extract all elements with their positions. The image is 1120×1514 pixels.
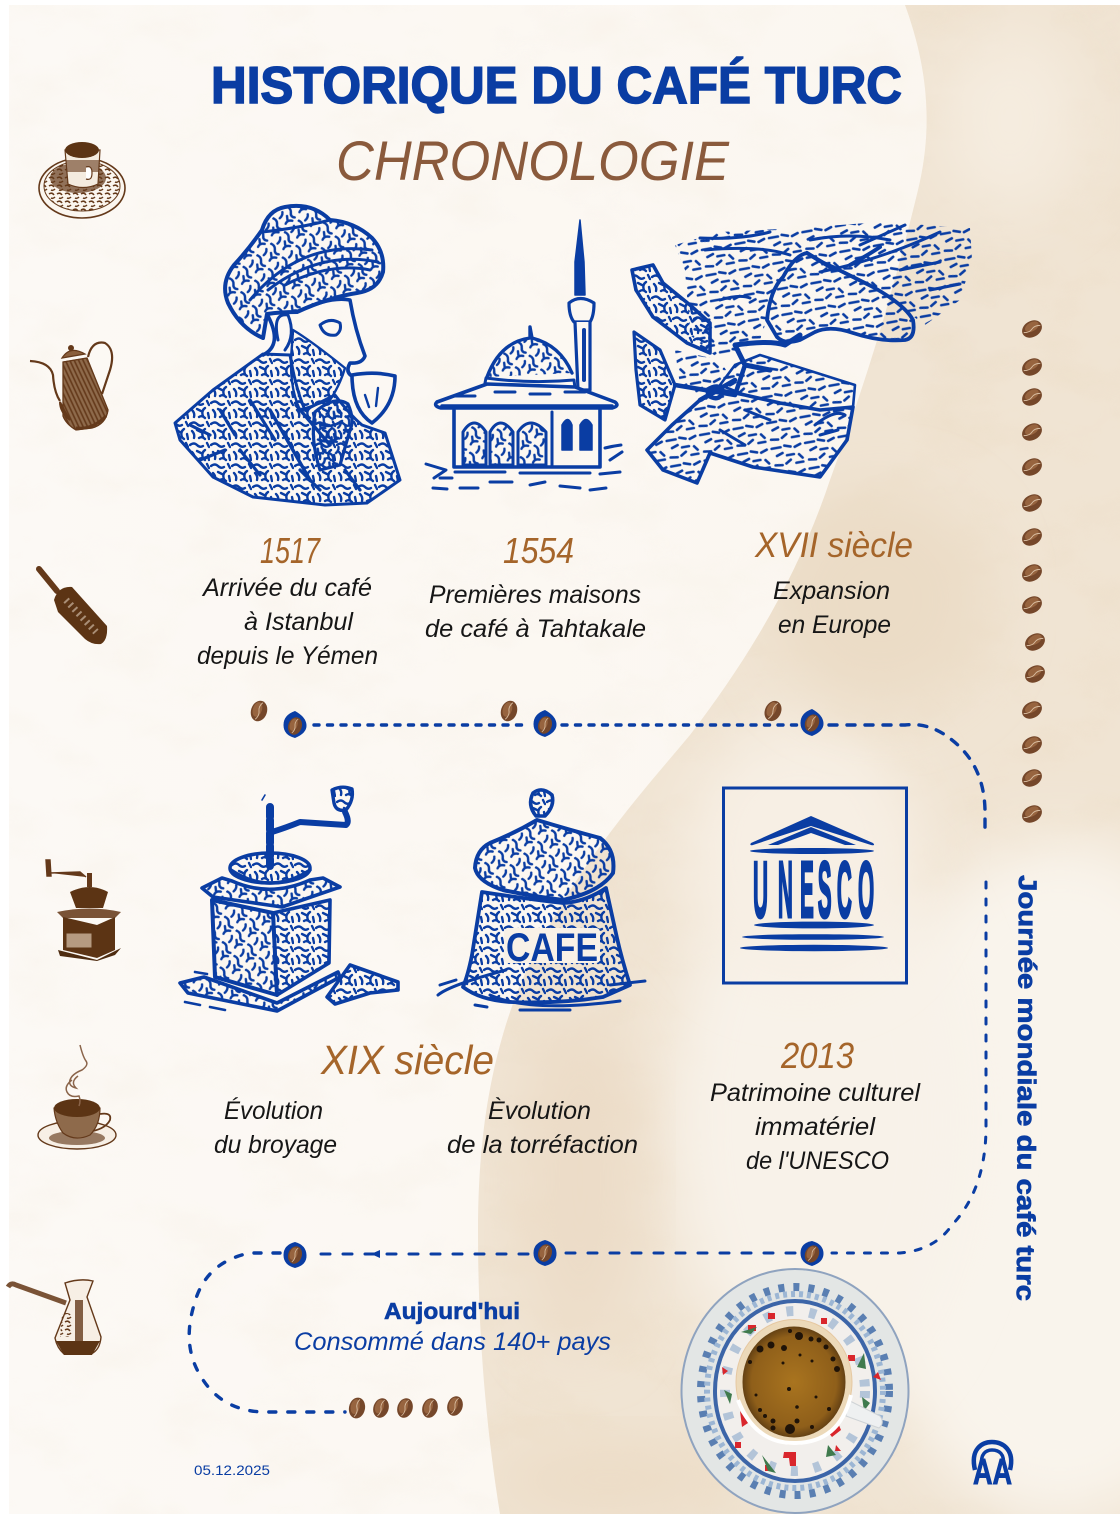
vertical beans column — [1019, 317, 1048, 826]
label: 1517: à Istanbul — [244, 608, 354, 636]
UNESCO logo: S — [818, 846, 832, 935]
icon: steaming cup — [38, 1045, 116, 1149]
UNESCO logo: U — [753, 846, 768, 935]
label: XIX siècle: Évolution — [224, 1096, 323, 1125]
Iberia and south — [634, 332, 675, 420]
label: XIX siècle: Èvolution — [488, 1096, 591, 1125]
photo: Turkish coffee cup on plate — [682, 1269, 908, 1513]
Anatolia shape — [767, 253, 914, 342]
label: today: Aujourd'hui — [384, 1298, 520, 1324]
northern scatter — [675, 222, 972, 360]
label: XVII siècle: Expansion — [773, 577, 890, 605]
icon: cezve — [8, 1280, 101, 1355]
label: XVII siècle — [754, 526, 913, 639]
label: 1517 — [197, 530, 378, 670]
illustration: coffee sack: CAFE — [506, 926, 598, 970]
Balkans — [735, 335, 800, 370]
label: 1554: 1554 — [503, 530, 574, 571]
label: 1554 — [425, 530, 646, 643]
label: XVII siècle: XVII siècle — [754, 526, 913, 565]
logo: AA — [973, 1442, 1012, 1492]
hand — [313, 401, 352, 470]
label: 1554: de café à Tahtakale — [425, 615, 646, 643]
illustration: coffee sack — [438, 790, 645, 1010]
date: 05.12.2025 — [194, 1462, 270, 1478]
label: XIX siècle: XIX siècle — [320, 1037, 494, 1083]
label: 1554: Premières maisons — [429, 581, 641, 609]
UNESCO logo: E — [800, 846, 814, 935]
icon: coffee scoop — [39, 569, 107, 644]
roof — [436, 384, 617, 408]
icon: coffee grinder small — [46, 860, 121, 961]
ground — [426, 445, 622, 490]
label: XIX siècle: du broyage — [214, 1131, 337, 1159]
timeline nodes — [284, 709, 824, 1268]
label: 1517: depuis le Yémen — [197, 642, 378, 670]
beans at end of timeline — [347, 1394, 465, 1420]
UNESCO logo: N — [778, 846, 793, 935]
arrow on timeline — [371, 1250, 380, 1258]
label: today: Consommé dans 140+ pays — [294, 1328, 611, 1356]
label: 2013: de l'UNESCO — [746, 1147, 889, 1175]
label: 2013: Patrimoine culturel — [710, 1079, 921, 1107]
beans above the timeline — [248, 698, 785, 724]
turban — [225, 206, 383, 338]
cup — [352, 373, 395, 423]
illustration: man drinking coffee — [175, 206, 400, 505]
label: XIX siècle — [214, 1037, 638, 1159]
dome — [487, 327, 572, 377]
timeline path — [189, 725, 986, 1412]
illustration: map of Europe — [632, 222, 972, 483]
label: XVII siècle: en Europe — [778, 611, 891, 639]
UNESCO logo: O — [858, 846, 874, 935]
subtitle: CHRONOLOGIE — [336, 129, 730, 192]
icon: coffee pot — [30, 343, 112, 430]
label: today — [294, 1298, 611, 1356]
illustration: mosque — [426, 220, 622, 490]
body — [175, 354, 400, 505]
label: 2013 — [710, 1035, 921, 1175]
icon: cup on saucer — [39, 142, 125, 218]
label: 2013: 2013 — [780, 1035, 854, 1076]
Italy shape — [632, 265, 710, 353]
UNESCO logo: C — [837, 846, 852, 935]
face and beard — [263, 299, 365, 376]
minaret — [575, 220, 585, 295]
logo: AA: AA — [973, 1451, 1012, 1492]
title: HISTORIQUE DU CAFÉ TURC — [211, 57, 902, 115]
label: 1517: 1517 — [260, 530, 321, 571]
illustration: coffee grinder — [180, 787, 398, 1011]
UNESCO logo — [724, 788, 906, 983]
building — [454, 410, 600, 467]
label: XIX siècle: de la torréfaction — [447, 1131, 638, 1159]
label: 2013: immatériel — [755, 1113, 877, 1141]
vertical caption: Journée mondiale du café turc — [1011, 875, 1041, 1301]
label: 1517: Arrivée du café — [201, 574, 372, 602]
